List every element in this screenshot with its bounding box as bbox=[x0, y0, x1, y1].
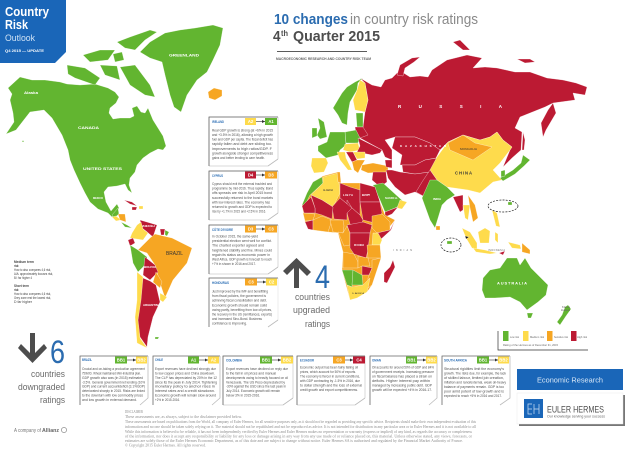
body text: growth. The risks due, for example, the lack bbox=[444, 372, 506, 376]
rating change bbox=[245, 278, 277, 286]
North America bbox=[6, 30, 166, 217]
title: 10 changes bbox=[274, 11, 348, 28]
title: 4 bbox=[273, 28, 281, 45]
South America bbox=[128, 220, 192, 348]
rating change: BB2 bbox=[137, 358, 146, 362]
body text: the recovery in the US (remittances, exports) bbox=[212, 312, 272, 316]
map country labels: CHINA bbox=[455, 170, 472, 176]
disclaimer: estimates are solely those of the Euler Hermes Economic Department, as of this date and are subject to change without notice. Euler Hermes SA is authorised and regulated by the Financial Market Authority of France. bbox=[125, 439, 463, 444]
card: Cote d'Ivoire bbox=[209, 225, 278, 274]
body text: July 2014. Economic growth will remain bbox=[226, 389, 280, 393]
rating change bbox=[333, 356, 365, 364]
label: SOUTH AFRICA bbox=[444, 358, 467, 362]
map country labels: ARGENTINA bbox=[143, 303, 160, 307]
body text: to dollar strength and the loss of external bbox=[300, 384, 362, 388]
map country labels: EGYPT bbox=[362, 193, 370, 197]
map country labels: Alaska bbox=[24, 91, 39, 95]
rating change: C3 bbox=[248, 280, 254, 284]
rating change: A1 bbox=[191, 358, 197, 362]
body text: to low copper prices and China slowdown. bbox=[155, 371, 215, 375]
label: CÔTE D'IVOIRE bbox=[212, 227, 233, 232]
body text: fuel and GDP per capita. The fiscal deficit has bbox=[212, 138, 273, 142]
high risk key: High risk bbox=[577, 335, 587, 339]
disclaimer: © Copyright 2015 Euler Hermes. All rights reserved. bbox=[125, 443, 206, 448]
rating change: BB2 bbox=[499, 358, 508, 362]
label: CHILE bbox=[155, 358, 163, 362]
header text: Risk bbox=[5, 18, 28, 32]
map country labels: LIBYA bbox=[343, 193, 353, 197]
map country labels bbox=[24, 54, 571, 312]
rating change: A1 bbox=[268, 119, 274, 124]
body text: interest rates and a credit slowdown. bbox=[155, 389, 215, 393]
rating change bbox=[245, 226, 277, 232]
body text: on fiscal balance has placed a strain on bbox=[372, 374, 432, 378]
low risk key: Low risk bbox=[510, 335, 519, 339]
map country labels: RUSSIA bbox=[398, 104, 503, 109]
map country labels: ALGERIA bbox=[323, 188, 333, 192]
label: COLOMBIA bbox=[226, 358, 242, 362]
body text: successfully returned to the bond markets bbox=[212, 196, 273, 200]
body text: deteriorated sharply in 2015. Risks are linked bbox=[82, 389, 145, 393]
header text: Q4 2015 — UPDATE bbox=[5, 49, 44, 53]
world risk map bbox=[6, 25, 587, 348]
title: th bbox=[281, 29, 288, 38]
body text: confidence is improving. bbox=[212, 322, 247, 326]
map country labels: INDIAN bbox=[393, 249, 412, 252]
map country labels: AUSTRALIA bbox=[497, 280, 527, 286]
body text bbox=[212, 234, 272, 266]
Middle East bbox=[373, 183, 407, 217]
rating change: A2 bbox=[248, 119, 254, 124]
left legend note: How to also compares 4,6 risk, bbox=[14, 268, 51, 272]
rating change: BB1 bbox=[407, 358, 416, 362]
rating change: BB2 bbox=[427, 358, 436, 362]
body text: with GDP contracting by -1.5% in 2016, due bbox=[300, 379, 360, 383]
disclaimer: These assessments are based on publications from the World, all company of Euler Hermes, for all sensitive purposes only, as it should not be regarded as providing any specific advice. Recipients should make their own independent evaluation of this bbox=[125, 420, 476, 425]
body text: credit growth and export competitiveness. bbox=[300, 388, 358, 392]
body text: and increased Sino-Bond. Business bbox=[212, 317, 262, 321]
title: Quarter 2015 bbox=[293, 28, 380, 45]
body text bbox=[82, 367, 146, 402]
body text: Economic growth will remain slow around bbox=[155, 394, 216, 398]
map country labels: BOLIVIA bbox=[144, 265, 156, 269]
economic research banner bbox=[517, 369, 623, 390]
body text bbox=[212, 182, 273, 214]
rating change: BB1 bbox=[262, 358, 271, 362]
body text: developments owing to heavily focused on oil bbox=[226, 376, 288, 380]
left legend note: A/A: approximately focuses risk, bbox=[14, 272, 53, 276]
disclaimer: These assessments are, as always, subject to the disclaimer provided below. bbox=[125, 415, 242, 420]
body text: monetary policy to anchor rises in bbox=[155, 385, 215, 389]
upgraded count: 4 bbox=[315, 259, 330, 295]
body text: and low growth in external demand. bbox=[82, 398, 137, 402]
disclaimer: information and no one should be taken solely relying on it. The material should not be republished and not be reproduced as advice. It is not intended for distribution in any particular area or in Euler Hermes and it is not available to all bbox=[125, 425, 476, 429]
rating change: A2 bbox=[211, 358, 217, 362]
body text: The CLP has depreciated by 20% in the 12 bbox=[155, 376, 217, 380]
map country labels: KAZAKHSTAN bbox=[400, 144, 446, 148]
upgraded caption: ratings bbox=[305, 319, 330, 330]
body text: prices, which account for 50% of exports. bbox=[300, 370, 356, 374]
Japan and Korea bbox=[500, 155, 530, 181]
Africa bbox=[302, 172, 395, 300]
card: Honduras bbox=[209, 278, 278, 327]
downgraded caption: ratings bbox=[40, 395, 65, 406]
body text: Crucial and on-taking a production agreement bbox=[82, 367, 145, 371]
card: Brazil bbox=[80, 356, 148, 405]
economic research banner: Economic Research bbox=[537, 376, 603, 384]
Russia bbox=[360, 40, 587, 167]
Kazakhstan and Central Asia bbox=[372, 137, 440, 197]
rating change: C2 bbox=[269, 280, 275, 284]
Iceland bbox=[208, 88, 222, 100]
map country labels: INDIA bbox=[433, 197, 441, 201]
body text: rise by +1.7% in 2015 and +2.5% in 2016. bbox=[212, 210, 266, 214]
rating change: D3 bbox=[248, 226, 254, 232]
medium risk key: Medium risk bbox=[530, 335, 544, 339]
disclaimer bbox=[125, 410, 476, 448]
rating change: BB1 bbox=[479, 358, 488, 362]
body text: and +3.5% in 2016), allowing a high growth bbox=[212, 133, 273, 137]
body text: of government receipts. Increasing pressure bbox=[372, 370, 434, 374]
left legend note: Grey zone rest the lowest risk, bbox=[14, 296, 51, 300]
body text: Cyprus should exit the external troubled and bbox=[212, 182, 272, 186]
body text: Just improved by the IMF and benefitting bbox=[212, 290, 268, 294]
card: Chile bbox=[153, 356, 220, 405]
card: Ireland bbox=[209, 117, 278, 166]
rating change: BB2 bbox=[283, 358, 292, 362]
body text bbox=[155, 367, 217, 402]
body text: presidential election went well for conflict. bbox=[212, 239, 272, 243]
card: Colombia bbox=[223, 356, 293, 405]
map country labels: DR CONGO bbox=[354, 244, 364, 247]
body text: below 3% in 2015-2016. bbox=[226, 394, 260, 398]
brand tagline: Our knowledge serving your success bbox=[547, 414, 605, 418]
left legend note bbox=[14, 260, 53, 304]
body text: growth will be expected +4% in 2016-17. bbox=[372, 388, 432, 392]
body text: Real GDP growth is strong (at +6% in 2015 bbox=[212, 128, 273, 132]
downgraded caption bbox=[18, 369, 65, 406]
body text: expected to reach +5% in 2016 and 2017. bbox=[444, 394, 502, 398]
body text: The economy is fiercer in current conditions, bbox=[300, 374, 360, 378]
body text: from fiscal policies, the government is bbox=[212, 294, 266, 298]
body text: 750kt/D. Wheat maintained Mini-Industrial plan. bbox=[82, 371, 141, 375]
disclaimer: DISCLAIMER bbox=[125, 410, 143, 414]
rating change: C4 bbox=[356, 358, 362, 362]
body text: rapidly fallen and debt are sliding too. bbox=[212, 142, 272, 146]
body text: returned to growth and GDP is expected to bbox=[212, 205, 272, 209]
map country labels: New bbox=[562, 306, 570, 309]
map country labels: MONGOLIA bbox=[460, 147, 477, 151]
up arrow icon bbox=[283, 258, 311, 288]
card: Cyprus bbox=[209, 171, 278, 220]
rating change bbox=[245, 118, 277, 125]
map country labels: MEXICO bbox=[93, 196, 104, 200]
body text: of skilled labour, limited job creation, bbox=[444, 376, 504, 380]
Euler Hermes logo box bbox=[517, 393, 625, 426]
label: CYPRUS bbox=[212, 174, 223, 178]
body text: In October 2015, the same-yield bbox=[212, 234, 258, 238]
body text: since its the peak in July 2014. Tightening bbox=[155, 380, 217, 384]
South and South-East Asia bbox=[416, 170, 530, 255]
header block bbox=[0, 0, 66, 63]
downgraded caption: countries bbox=[31, 369, 65, 380]
body text bbox=[372, 366, 435, 392]
Central America and Caribbean bbox=[112, 200, 143, 228]
rating change bbox=[477, 356, 509, 364]
card: Oman bbox=[370, 356, 437, 405]
rating change bbox=[260, 356, 293, 364]
small island labels and dashed callouts bbox=[441, 200, 518, 252]
card: Ecuador bbox=[297, 356, 365, 405]
header text: Outlook bbox=[5, 33, 35, 44]
body text: regain its status as economic power in bbox=[212, 253, 270, 257]
body text bbox=[444, 367, 506, 398]
upgraded caption: upgraded bbox=[293, 305, 330, 316]
body text: managed by increasing public debt. GDP bbox=[372, 384, 432, 388]
Allianz line: Allianz bbox=[42, 428, 59, 434]
body text: with low interest rates. The economy has bbox=[212, 200, 270, 204]
rating change: D4 bbox=[248, 172, 254, 178]
disclaimer: of the information, nor does it accept any responsibility or liability for any loss or damage arising in any way from any use made of or reliance placed on, this material. Unless otherwise stated, any views, forecasts, or bbox=[125, 435, 473, 440]
body text: Export revenues have declined strongly due bbox=[155, 367, 216, 371]
map country labels: CANADA bbox=[78, 126, 100, 130]
Allianz line: A company of bbox=[14, 428, 42, 434]
body text: Economic growth should remain solid bbox=[212, 303, 267, 307]
left legend note: Short term bbox=[14, 284, 29, 288]
body text: GDP growth also was (in 2015) estimated bbox=[82, 376, 143, 380]
label: IRELAND bbox=[212, 120, 224, 124]
brand name: EULER HERMES bbox=[547, 404, 604, 414]
body text: achieving fiscal consolidation and debt. bbox=[212, 299, 267, 303]
body text: +2% in 2015-2016. bbox=[155, 398, 180, 402]
Allianz line bbox=[14, 427, 67, 434]
label: HONDURAS bbox=[212, 281, 229, 285]
rating change bbox=[245, 172, 277, 178]
label: BRAZIL bbox=[82, 358, 93, 362]
card: South Africa bbox=[442, 356, 510, 405]
down arrow icon bbox=[18, 333, 47, 363]
rating change bbox=[406, 356, 437, 364]
body text bbox=[212, 290, 272, 326]
body text: Venezuela. The US Peso depreciated by bbox=[226, 380, 285, 384]
body text: +7% in shown in 2016 and 2017. bbox=[212, 262, 256, 266]
Greenland bbox=[140, 25, 223, 112]
map country labels: Zealand bbox=[561, 309, 571, 312]
sensitive risk key: Sensitive risk bbox=[554, 335, 568, 339]
map country labels: S. AFRICA bbox=[352, 292, 365, 295]
left legend note: risk: bbox=[14, 264, 19, 268]
body text: inflation and rand/external, weak oil-heavy bbox=[444, 380, 506, 384]
upgraded caption: countries bbox=[295, 292, 330, 303]
left legend note: risk: bbox=[14, 288, 19, 292]
body text: gains and better lending to care health. bbox=[212, 156, 265, 160]
body text bbox=[300, 366, 362, 392]
logo mark bbox=[524, 399, 543, 418]
body text: to the fall in oil prices and manual bbox=[226, 371, 276, 375]
downgraded count: 6 bbox=[50, 334, 65, 370]
body text: growth alongside stronger competitiveness bbox=[212, 151, 273, 155]
body text: West Africa. GDP growth is forecast to reach bbox=[212, 258, 272, 262]
header text bbox=[5, 5, 49, 53]
body text: heightened stability and fine. Mines could bbox=[212, 248, 272, 252]
body text: balance of payments remain. GDP is too bbox=[444, 385, 504, 389]
rating change: C3 bbox=[268, 226, 274, 232]
label: OMAN bbox=[372, 358, 381, 362]
title bbox=[273, 11, 478, 45]
body text: Export revenues have declined on reply due bbox=[226, 367, 288, 371]
body text: -30% against the USD since the last peak in bbox=[226, 385, 286, 389]
body text: improvements to high ratios/GDP. F bbox=[212, 147, 273, 151]
body text: Economic output has been fairly falling oil bbox=[300, 366, 358, 370]
body text: -3.5%. General government net lending (10% bbox=[82, 380, 146, 384]
Mongolia bbox=[448, 135, 492, 160]
header text: Country bbox=[5, 5, 49, 19]
body text bbox=[212, 128, 273, 160]
rating change: BB1 bbox=[117, 358, 126, 362]
title: in country risk ratings bbox=[350, 11, 478, 28]
upgraded callout bbox=[283, 258, 330, 330]
rating change bbox=[115, 356, 147, 364]
left legend note: D far higher bbox=[14, 300, 33, 304]
body text: Structural rigidities limit the economy's bbox=[444, 367, 504, 371]
downgraded caption: downgraded bbox=[18, 382, 65, 393]
subtitle: MACROECONOMIC RESEARCH AND COUNTRY RISK TEAM bbox=[276, 57, 371, 61]
map country labels: SAUDI A. bbox=[385, 196, 398, 200]
China bbox=[430, 132, 512, 193]
map country labels: UNITED STATES bbox=[83, 167, 123, 171]
label: ECUADOR bbox=[300, 358, 314, 362]
risk legend bbox=[498, 331, 588, 350]
Europe bbox=[311, 78, 388, 173]
body text: GDP) and current accountdeficit (3.1%GDP) bbox=[82, 385, 145, 389]
downgraded callout bbox=[18, 333, 65, 406]
map country labels: BRAZIL bbox=[166, 251, 183, 257]
Australia and New Zealand bbox=[482, 258, 571, 325]
left legend note: B/: far higher 4 bbox=[14, 276, 32, 280]
rating change: D3 bbox=[268, 172, 274, 178]
body text: The charted exporter agreed and bbox=[212, 244, 264, 248]
rating change: C3 bbox=[336, 358, 342, 362]
upgraded caption bbox=[293, 292, 330, 330]
body text: Oil accounts for around 50% of GDP and 84% bbox=[372, 366, 435, 370]
left legend note: Medium term bbox=[14, 260, 34, 264]
body text: owing partly, benefiting from low oil prices, bbox=[212, 308, 272, 312]
body text: poor amid potent of low growth and is bbox=[444, 390, 504, 394]
header blue tab bbox=[0, 0, 66, 63]
map country labels: VENEZUELA bbox=[142, 224, 155, 228]
body text: deficits. Higher interest pay within bbox=[372, 379, 430, 383]
body text: programme by mid-2016. Thus rapidly. Bond bbox=[212, 187, 273, 191]
body text: to the downturn with low commodity prices bbox=[82, 394, 143, 398]
map country labels: GREENLAND bbox=[169, 54, 200, 58]
disclaimer: While this information is believed to be reliable, it has not been independently verified by Euler Hermes and Euler Hermes makes no representation or warranty (express or implied) of any kind, as regards the accuracy or completeness bbox=[125, 430, 473, 435]
left legend note: How to also compares 4,6 risk, bbox=[14, 292, 51, 296]
body text: offs spreads are risk in April 2015 bond bbox=[212, 191, 272, 195]
map country labels: INDONESIA bbox=[488, 249, 505, 252]
body text bbox=[226, 367, 288, 398]
rating change bbox=[188, 356, 219, 364]
legend note: Rating of the Hermes as of December 31, 2015 bbox=[503, 343, 558, 347]
